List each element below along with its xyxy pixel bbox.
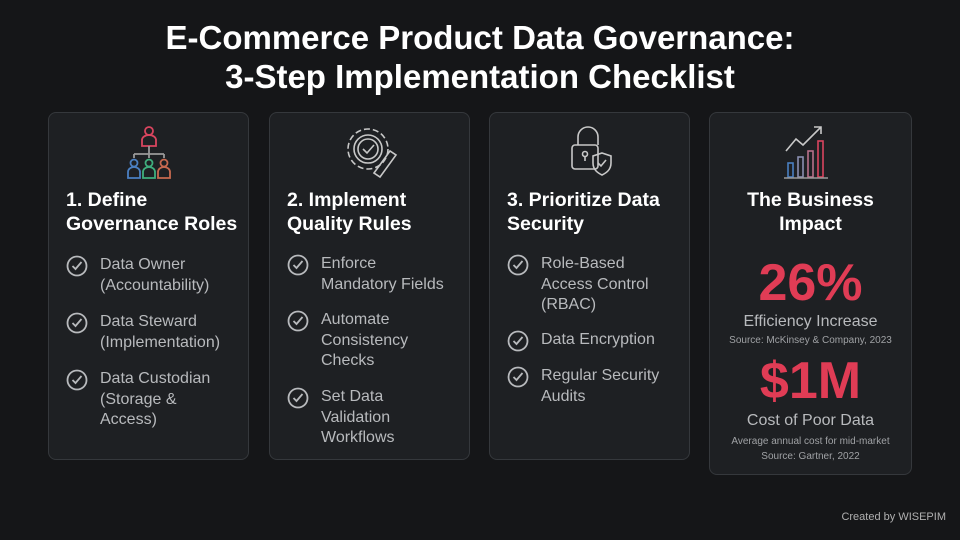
item: Audits: [541, 388, 585, 404]
note: [731, 436, 890, 462]
item: (Implementation): [100, 334, 220, 350]
item: [288, 388, 394, 446]
item: Checks: [321, 352, 374, 369]
item: Access): [100, 411, 157, 428]
label: Efficiency Increase: [744, 313, 878, 330]
item: [288, 310, 408, 369]
item: [66, 256, 209, 294]
heading: 1. Define: [66, 189, 147, 211]
title: [165, 19, 794, 95]
item: Role-Based: [541, 255, 625, 272]
heading: [747, 189, 874, 235]
item: Data Steward: [100, 313, 197, 330]
panel: roles: [48, 112, 249, 460]
label: Cost of Poor Data: [747, 412, 874, 429]
panel: quality: [269, 112, 470, 460]
item: (Storage &: [100, 390, 176, 408]
item: (Accountability): [100, 276, 209, 294]
item: Automate: [321, 311, 389, 328]
icon: growth chart: [784, 126, 828, 179]
heading: [287, 189, 412, 235]
heading: [66, 189, 237, 235]
heading: [507, 189, 660, 235]
title: E-Commerce Product Data Governance:: [165, 19, 794, 56]
heading: The Business: [747, 189, 874, 211]
item: [288, 254, 444, 292]
stat $1M: $1M: [760, 352, 861, 410]
item: [508, 254, 649, 313]
item: Data Encryption: [541, 331, 655, 348]
item: Data Owner: [100, 256, 185, 273]
item: Enforce: [321, 255, 376, 272]
icon: lock shield: [571, 126, 612, 176]
stat 26%: 26%: [758, 254, 863, 312]
note: Average annual cost for mid-market: [731, 436, 890, 447]
heading: Security: [507, 213, 584, 235]
item: (RBAC): [541, 296, 596, 313]
icon: org chart: [127, 126, 171, 179]
item: [508, 330, 655, 352]
item: Workflows: [321, 429, 394, 446]
icon: gear: [347, 128, 398, 178]
credit: Created by WISEPIM: [841, 511, 946, 523]
panel: impact: [709, 112, 912, 475]
heading: 2. Implement: [287, 189, 406, 211]
heading: Quality Rules: [287, 213, 412, 235]
item: Data Custodian: [100, 370, 210, 387]
note: Source: Gartner, 2022: [761, 451, 860, 462]
item: [508, 366, 660, 404]
heading: 3. Prioritize Data: [507, 189, 660, 211]
item: Mandatory Fields: [321, 276, 444, 292]
panel: security: [489, 112, 690, 460]
item: Validation: [321, 408, 390, 426]
heading: Governance Roles: [66, 213, 237, 235]
item: [66, 370, 210, 428]
item: [66, 312, 220, 350]
item: Regular Security: [541, 367, 659, 384]
title: 3-Step Implementation Checklist: [225, 58, 735, 95]
source: Source: McKinsey & Company, 2023: [729, 335, 892, 346]
heading: Impact: [779, 213, 842, 235]
item: Consistency: [321, 332, 408, 348]
item: Set Data: [321, 388, 383, 405]
item: Access Control: [541, 276, 649, 292]
